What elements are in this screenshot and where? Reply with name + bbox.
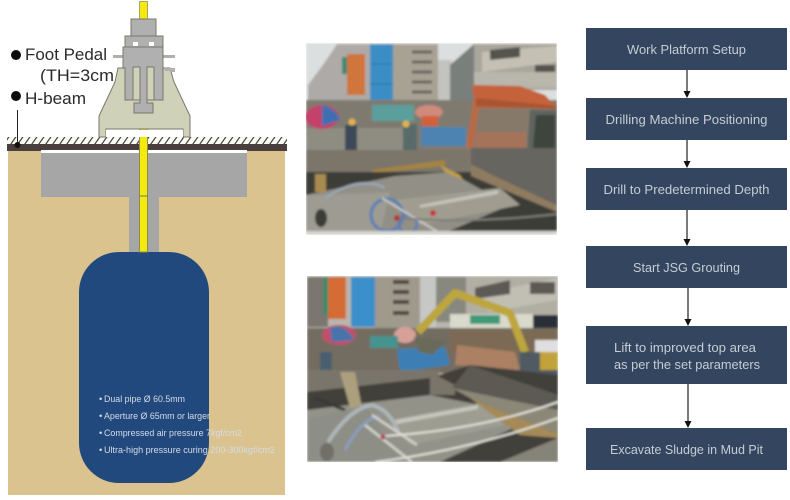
text block: grouting specifications: Dual pipe Ø 60.5mm (104, 394, 185, 405)
label: foot pedal: (TH=3cm (40, 66, 114, 85)
label: foot pedal (11, 45, 114, 85)
step: drilling machine positioning: Drilling Machine Positioning (606, 113, 768, 127)
text block: grouting specifications: • (99, 394, 102, 405)
text block: grouting specifications (99, 394, 275, 456)
arrow 5 (684, 384, 692, 428)
step: lift to improved top area: as per the set parameters (614, 358, 760, 372)
white gap under the beam (41, 150, 247, 154)
step: excavate sludge in mud pit (586, 428, 787, 470)
arrow 1 (684, 70, 690, 98)
flowchart: process steps (586, 28, 787, 470)
step: work platform setup (586, 28, 787, 70)
photo: construction site with yellow excavator (307, 276, 558, 462)
gray stem (129, 197, 159, 253)
step: excavate sludge in mud pit: Excavate Sludge in Mud Pit (610, 443, 764, 457)
text block: grouting specifications: • (99, 428, 102, 439)
yellow drill pipe (139, 2, 148, 252)
H-beam band (7, 144, 287, 151)
step: drill to predetermined depth: Drill to Predetermined Depth (604, 183, 770, 197)
text block: grouting specifications: • (99, 445, 102, 456)
step: lift to improved top area (586, 326, 787, 384)
drilling machine (99, 19, 190, 137)
arrow 3 (684, 210, 690, 246)
step: start JSG grouting (586, 246, 787, 288)
improved soil column (79, 252, 209, 483)
text block: grouting specifications: Ultra-high pressure curing 200-300kgf/cm2 (104, 445, 275, 456)
soil ground (8, 150, 285, 495)
arrow 4 (684, 288, 692, 326)
photo: construction site with orange excavator (305, 43, 557, 235)
arrow 2 (684, 140, 690, 168)
label: H-beam (11, 89, 86, 148)
step: drill to predetermined depth (586, 168, 787, 210)
label: foot pedal: Foot Pedal (25, 45, 107, 64)
text block: grouting specifications: • (99, 411, 102, 422)
text block: grouting specifications: Aperture Ø 65mm or larger (104, 411, 210, 422)
hatched steel plate (7, 137, 287, 144)
step: lift to improved top area: Lift to improved top area (614, 341, 756, 355)
label: H-beam: H-beam (25, 89, 86, 108)
step: drilling machine positioning (586, 98, 787, 140)
step: start JSG grouting: Start JSG Grouting (633, 261, 740, 275)
text block: grouting specifications: Compressed air pressure 7kgf/cm2 (104, 428, 242, 439)
step: work platform setup: Work Platform Setup (627, 43, 746, 57)
panel: cross-section diagram (7, 2, 287, 495)
gray excavated block (41, 153, 247, 197)
